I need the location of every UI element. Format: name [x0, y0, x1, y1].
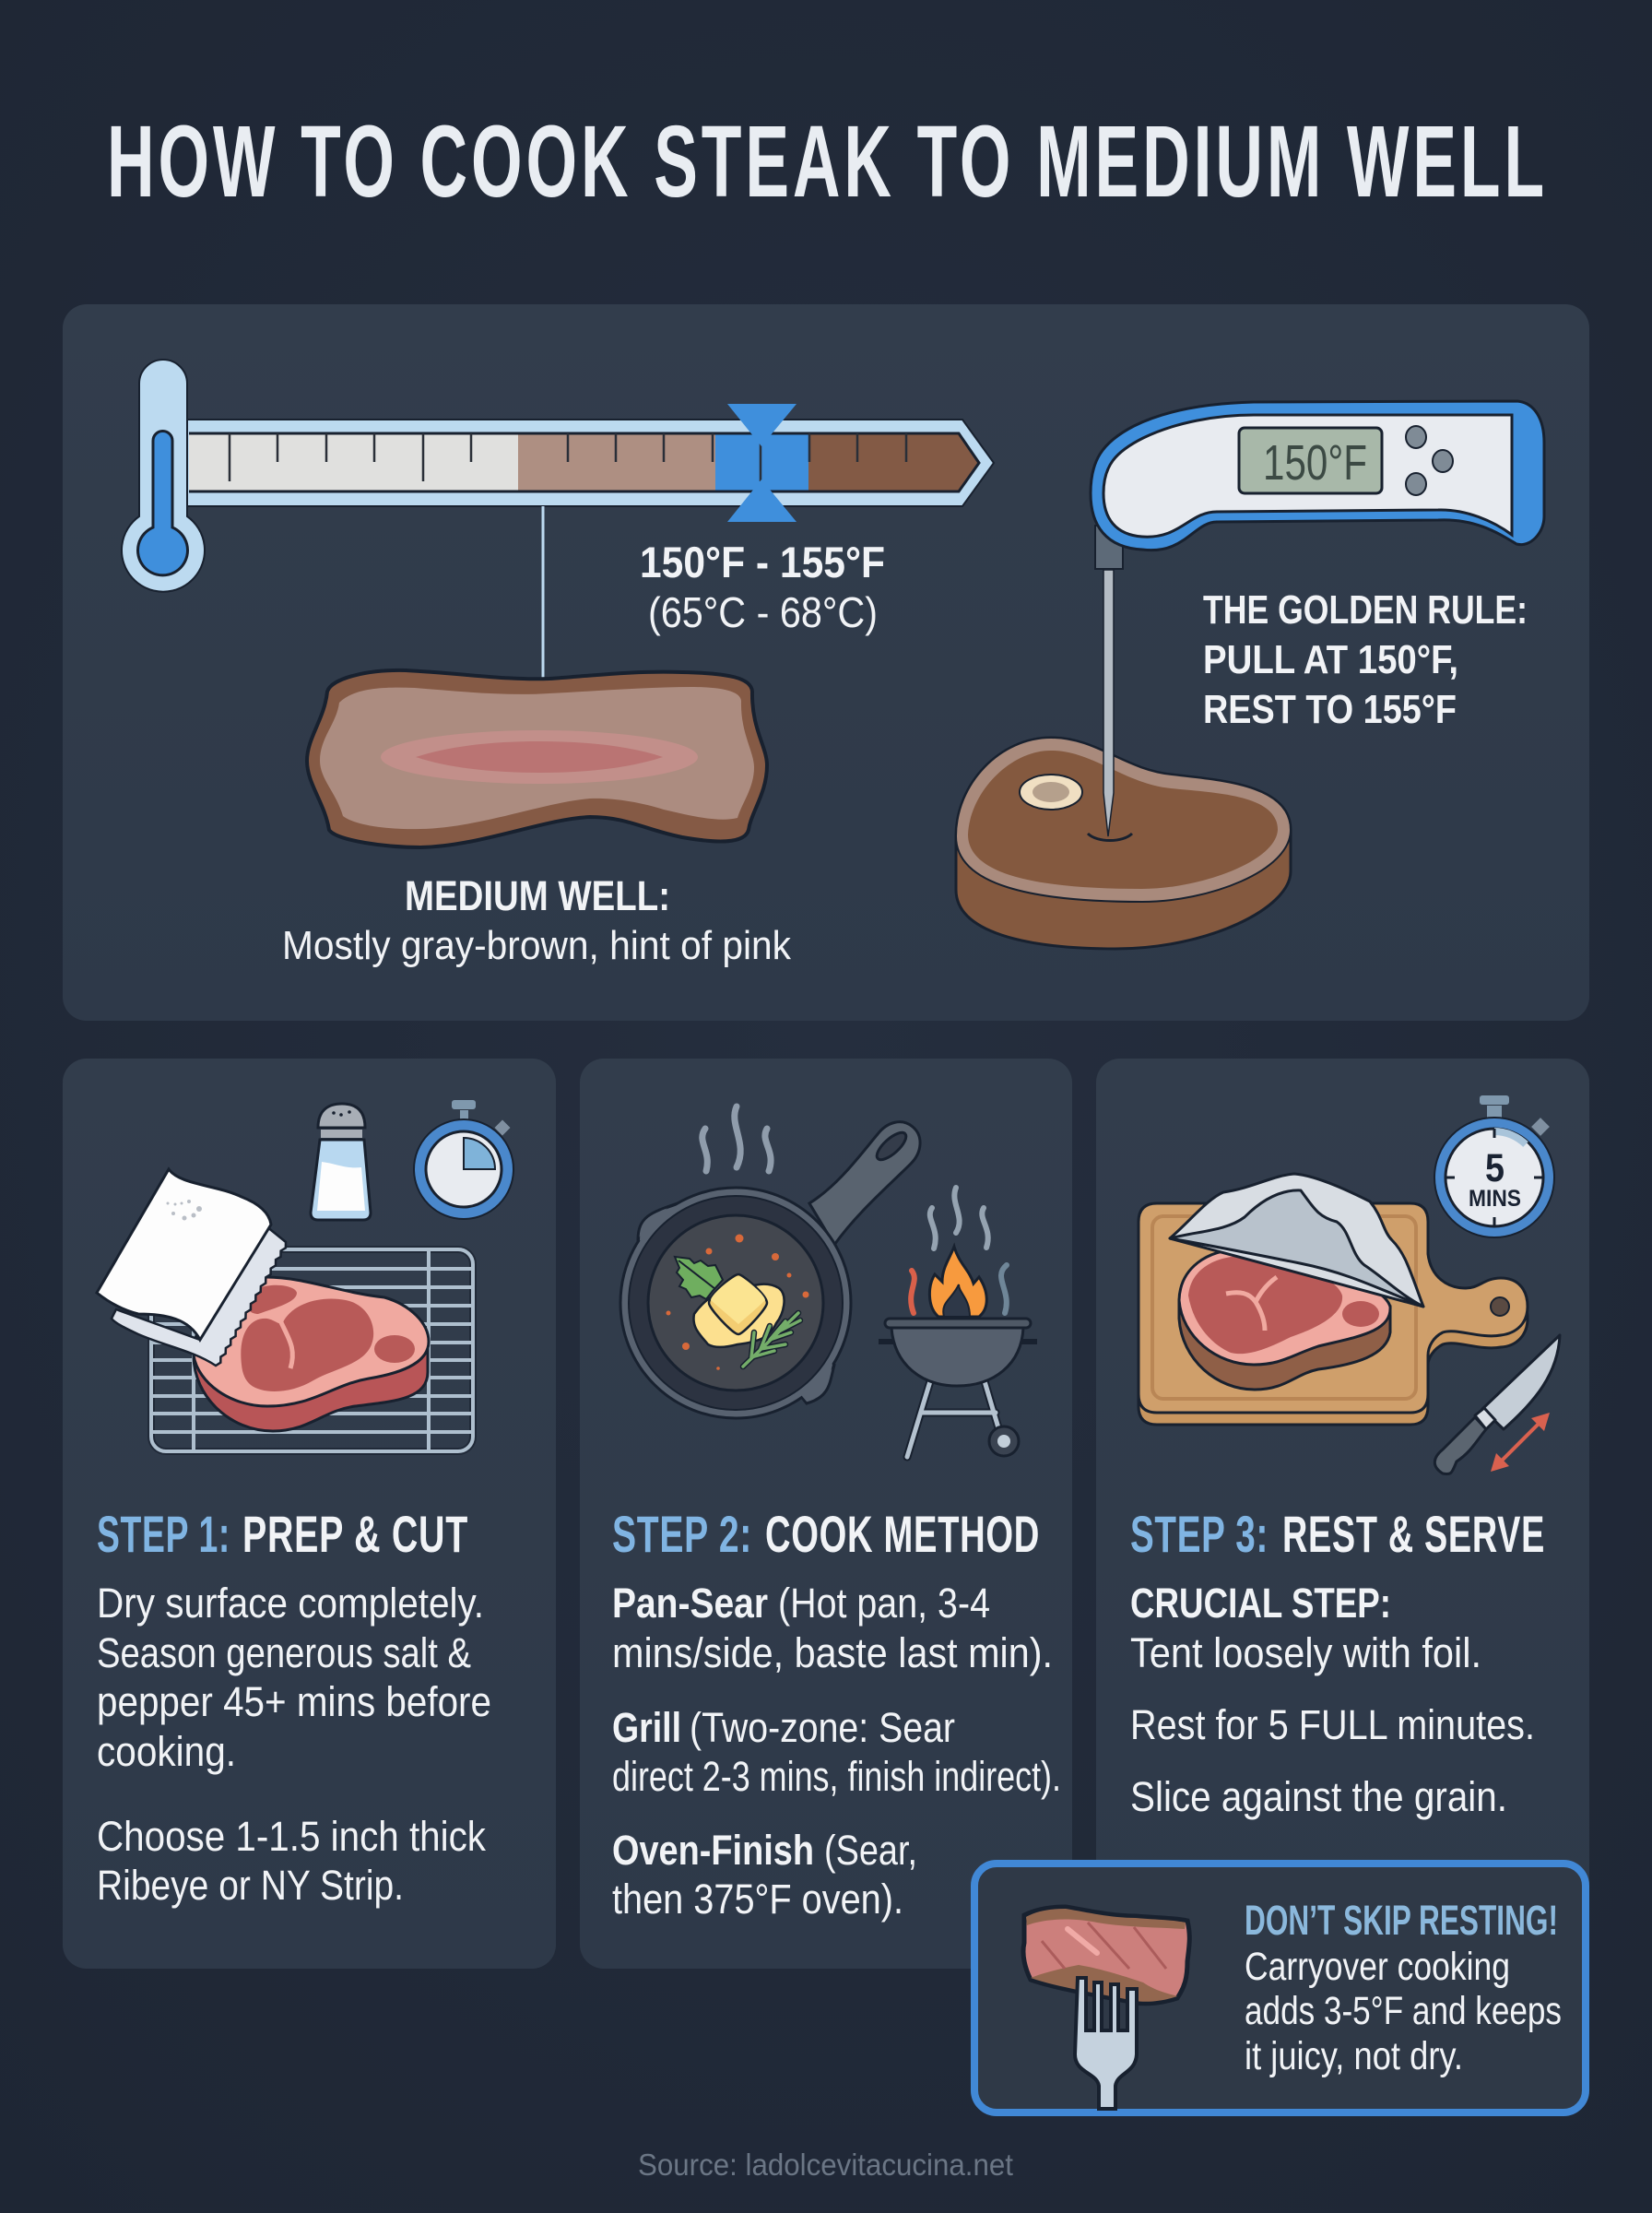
icon: resting steak — [1179, 1249, 1390, 1390]
step 1 text: cooking. — [97, 1728, 236, 1775]
callout text: Carryover cooking — [1245, 1945, 1510, 1989]
icon: knife — [1434, 1335, 1560, 1474]
icon: cutting board — [1139, 1203, 1528, 1425]
step 2 heading — [612, 1505, 1040, 1563]
icon: slice direction arrow — [1491, 1413, 1550, 1472]
icon: 5 minute timer: 5 — [1485, 1146, 1504, 1190]
golden rule text: THE GOLDEN RULE: — [1203, 587, 1528, 633]
icon: 5 minute timer: MINS — [1469, 1186, 1521, 1212]
icon: wire rack — [151, 1249, 473, 1451]
fork — [1075, 1978, 1137, 2109]
golden rule text — [1203, 587, 1528, 732]
step 3 text: Rest for 5 FULL minutes. — [1130, 1701, 1535, 1748]
step 1 heading — [97, 1505, 468, 1563]
step 2 heading: COOK METHOD — [765, 1505, 1040, 1563]
step 1 text: Choose 1-1.5 inch thick — [97, 1813, 486, 1860]
step 1 text: pepper 45+ mins before — [97, 1678, 491, 1725]
step 3 text: Tent loosely with foil. — [1130, 1629, 1481, 1676]
icon: salt shaker — [311, 1104, 371, 1220]
range label — [640, 538, 885, 636]
step 2 heading: STEP 2: — [612, 1505, 752, 1563]
icon: cast iron skillet — [620, 1122, 920, 1418]
step 2 text: mins/side, baste last min). — [612, 1629, 1053, 1676]
icon: pan steam — [702, 1106, 771, 1171]
icon: stopwatch — [414, 1100, 513, 1219]
step 2 text: (Sear, — [824, 1827, 917, 1874]
source line: Source: ladolcevitacucina.net — [638, 2148, 1013, 2182]
panel: step 2 — [580, 1059, 1072, 1969]
step 3 heading — [1130, 1505, 1545, 1563]
icon: rosemary — [743, 1313, 800, 1367]
callout text — [1245, 1897, 1562, 2078]
golden rule text: REST TO 155°F — [1203, 687, 1457, 732]
icon: steak bite on fork — [1023, 1907, 1189, 2109]
lcd display — [1239, 428, 1382, 493]
marker: bottom triangle — [727, 479, 796, 522]
step 1 heading: PREP & CUT — [242, 1505, 468, 1563]
callout: don't skip resting — [974, 1864, 1586, 2112]
callout text: adds 3-5°F and keeps — [1245, 1989, 1562, 2033]
step 3 heading: STEP 3: — [1130, 1505, 1268, 1563]
panel: step 3 — [1096, 1059, 1589, 1969]
doneness label: MEDIUM WELL: — [405, 872, 670, 919]
step 2 text — [612, 1580, 1061, 1923]
step 2 text: Oven-Finish — [612, 1827, 814, 1874]
icon: instant-read thermometer — [1091, 401, 1544, 569]
icon: temperature thermometer — [122, 360, 994, 592]
step 1 text — [97, 1580, 491, 1909]
doneness label: Mostly gray-brown, hint of pink — [282, 923, 792, 968]
golden rule text: PULL AT 150°F, — [1203, 637, 1458, 682]
step 1 text: Ribeye or NY Strip. — [97, 1862, 404, 1909]
panel: step 1 — [63, 1059, 556, 1969]
step 1 text: Season generous salt & — [97, 1629, 471, 1676]
step 1 text: Dry surface completely. — [97, 1580, 484, 1627]
range label: 150°F - 155°F — [640, 538, 885, 586]
sparks — [666, 1234, 809, 1370]
connector line — [542, 506, 544, 679]
icon: paper towel — [97, 1169, 286, 1366]
icon: 5 minute timer — [1434, 1095, 1554, 1237]
step 2 text: (Hot pan, 3-4 — [778, 1580, 990, 1627]
icon: steak with probe — [956, 570, 1291, 949]
icon: grill — [879, 1188, 1037, 1457]
step 3 text: CRUCIAL STEP: — [1130, 1580, 1391, 1627]
lcd display: 150°F — [1263, 435, 1367, 491]
step 2 text: Pan-Sear — [612, 1580, 768, 1627]
step 2 text: then 375°F oven). — [612, 1876, 903, 1923]
icon: flame — [929, 1247, 986, 1317]
step 1 heading: STEP 1: — [97, 1505, 230, 1563]
range label: (65°C - 68°C) — [648, 588, 878, 636]
callout text: it juicy, not dry. — [1245, 2034, 1463, 2078]
step 3 text: Slice against the grain. — [1130, 1773, 1507, 1820]
icon: melted butter — [693, 1274, 785, 1347]
step 3 text — [1130, 1580, 1535, 1820]
step 2 text: direct 2-3 mins, finish indirect). — [612, 1753, 1061, 1800]
doneness label — [282, 872, 792, 968]
step 2 text: (Two-zone: Sear — [690, 1704, 955, 1751]
icon: foil tent — [1170, 1174, 1423, 1307]
icon: herb leaf — [675, 1257, 723, 1299]
icon: raw steak — [194, 1277, 429, 1431]
panel: temperature guide — [63, 304, 1589, 1021]
step 2 text: Grill — [612, 1704, 681, 1751]
marker: top triangle — [727, 404, 796, 446]
icon: medium well steak slice — [307, 670, 767, 847]
